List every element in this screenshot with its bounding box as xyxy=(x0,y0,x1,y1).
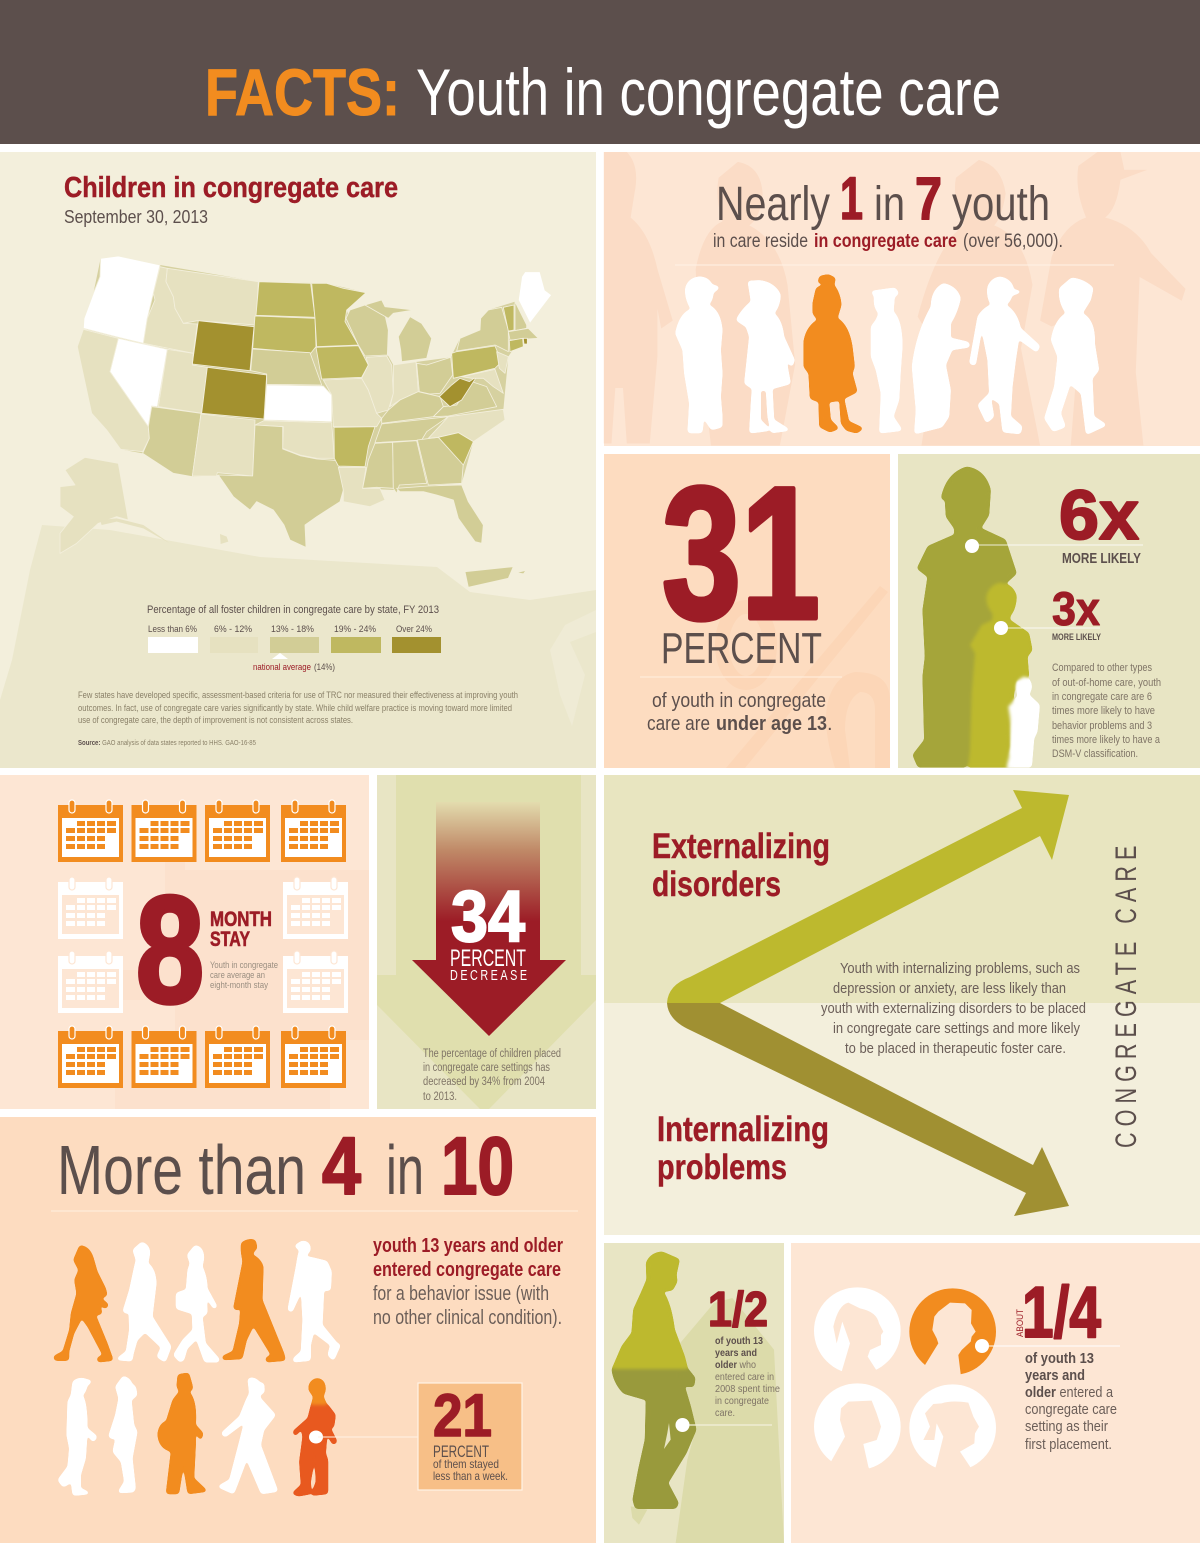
legend: 13% - 18% xyxy=(271,624,314,635)
heading: internalizing: Internalizing xyxy=(657,1110,829,1149)
caption: of youth in congregate xyxy=(652,690,826,712)
heading: externalizing xyxy=(652,827,830,904)
headline: Nearly xyxy=(716,178,830,231)
panel: nearly 1 in 7 xyxy=(604,152,1200,446)
description: depression or anxiety, are less likely than xyxy=(833,980,1066,997)
caption xyxy=(647,690,833,735)
stat: DECREASE xyxy=(450,966,527,983)
description: times more likely to have a xyxy=(1052,734,1161,746)
legend: (14%) xyxy=(314,662,335,672)
headline: 10 xyxy=(441,1121,514,1212)
panel: 8 month stay xyxy=(0,775,369,1109)
stat: 1/2 xyxy=(708,1283,768,1337)
description: in congregate care are 6 xyxy=(1052,691,1152,703)
subheading: in care reside xyxy=(713,231,808,252)
title: Youth in congregate care xyxy=(416,55,1001,129)
description: The percentage of children placed xyxy=(423,1048,561,1060)
stat: 3x: MORE LIKELY xyxy=(1052,632,1102,643)
month stay label: MONTH xyxy=(210,908,272,931)
description: congregate care xyxy=(1025,1401,1117,1418)
description: behavior problems and 3 xyxy=(1052,720,1152,732)
callout: 21 percent: of them stayed xyxy=(433,1457,499,1471)
background child silhouettes xyxy=(604,152,1186,446)
description: decreased by 34% from 2004 xyxy=(423,1076,545,1088)
headline: in xyxy=(386,1131,424,1209)
callout: 21 percent: 21 xyxy=(433,1382,492,1449)
description: in congregate care settings has xyxy=(423,1062,550,1074)
headline xyxy=(716,165,1050,232)
percent label: PERCENT xyxy=(661,624,822,673)
caption xyxy=(210,960,278,990)
stat: 6x: 6x xyxy=(1059,476,1139,554)
watermark building xyxy=(115,845,369,1109)
stat: 34 xyxy=(451,877,525,957)
heading: externalizing: disorders xyxy=(652,865,781,904)
description: first placement. xyxy=(1025,1436,1112,1453)
stat: 1/4 xyxy=(1022,1273,1101,1353)
description: Compared to other types xyxy=(1052,662,1152,674)
caption: care are xyxy=(647,713,710,735)
legend: national average xyxy=(253,662,311,672)
panel: map of children in congregate care xyxy=(0,152,596,768)
title: FACTS: xyxy=(205,55,400,129)
month stay label: STAY xyxy=(210,928,250,951)
panel: 34 percent decrease xyxy=(377,775,596,1109)
panel: one half xyxy=(604,1243,784,1543)
legend: Percentage of all foster children in congregate care by state, FY 2013 xyxy=(147,604,439,616)
legend xyxy=(147,604,441,672)
description: entered congregate care xyxy=(373,1259,561,1281)
map paragraph xyxy=(78,690,518,726)
headline: 1 xyxy=(840,165,863,232)
arrow: internalizing, downward xyxy=(667,1003,1069,1216)
description: to 2013. xyxy=(423,1091,457,1103)
panel: 6x and 3x more likely xyxy=(898,454,1200,768)
arrow: externalizing, upward xyxy=(667,790,1069,1003)
heading: externalizing: Externalizing xyxy=(652,827,830,866)
map paragraph: Few states have developed specific, assessment-based criteria for use of TRC nor measured their effectiveness at improving youth xyxy=(78,690,518,701)
description: times more likely to have xyxy=(1052,705,1155,717)
white calendars xyxy=(58,877,348,1013)
icon: five walking youth, first row xyxy=(54,1240,340,1362)
description: Youth with internalizing problems, such as xyxy=(840,960,1080,977)
map paragraph: outcomes. In fact, use of congregate care varies significantly by state. While child welfare practice is moving toward more limited xyxy=(78,703,512,714)
heading: internalizing xyxy=(657,1110,829,1187)
headline: youth xyxy=(952,178,1050,231)
description: in congregate care settings and more likely xyxy=(833,1020,1080,1037)
legend: 6% - 12% xyxy=(214,624,253,635)
headline: More than xyxy=(57,1131,306,1209)
subheading: (over 56,000). xyxy=(963,231,1063,252)
description xyxy=(821,960,1086,1057)
about label: ABOUT xyxy=(1015,1309,1026,1337)
subheading xyxy=(713,231,1063,252)
callout: 21 percent: less than a week. xyxy=(433,1469,508,1483)
description: setting as their xyxy=(1025,1418,1108,1435)
stat: 3x: 3x xyxy=(1052,582,1100,635)
month stay label xyxy=(210,908,272,951)
description xyxy=(1052,662,1161,760)
stat: PERCENT xyxy=(450,945,526,972)
caption: eight-month stay xyxy=(210,980,268,990)
legend: Less than 6% xyxy=(148,624,197,635)
icon: five walking youth, second row xyxy=(58,1373,337,1496)
choropleth US map xyxy=(60,256,552,587)
panel: more than 4 in 10 xyxy=(0,1117,596,1543)
headline: 7 xyxy=(915,165,942,232)
description: to be placed in therapeutic foster care. xyxy=(845,1040,1066,1057)
subheading: in congregate care xyxy=(814,231,957,252)
orange calendars xyxy=(58,800,346,1088)
caption: care average an xyxy=(210,970,265,980)
title xyxy=(205,55,1001,129)
callout: 21 percent: PERCENT xyxy=(433,1442,489,1461)
heading: internalizing: problems xyxy=(657,1148,787,1187)
date: September 30, 2013 xyxy=(64,207,208,227)
icon: walking youth with bag xyxy=(612,1252,696,1508)
icon: four head silhouettes xyxy=(814,1287,996,1475)
heading: Children in congregate care xyxy=(64,172,398,204)
description: older entered a xyxy=(1025,1384,1114,1401)
description: DSM-V classification. xyxy=(1052,748,1138,760)
description: youth with externalizing disorders to be placed xyxy=(821,1000,1086,1017)
description xyxy=(715,1335,780,1419)
map paragraph: use of congregate care, the depth of improvement is not consistent across states. xyxy=(78,715,353,726)
description xyxy=(423,1048,561,1103)
header banner xyxy=(0,0,1200,144)
background silhouette xyxy=(631,1298,784,1543)
caption: . xyxy=(827,713,833,735)
description: youth 13 years and older xyxy=(373,1235,563,1257)
stat: 6x: MORE LIKELY xyxy=(1062,551,1141,567)
headline xyxy=(57,1121,514,1212)
description: of out-of-home care, youth xyxy=(1052,677,1161,689)
watermark percent sign xyxy=(722,586,890,768)
icon: three child silhouettes xyxy=(913,467,1039,767)
headline: in xyxy=(874,178,905,231)
description: entered care in xyxy=(715,1371,774,1383)
description: of youth 13 xyxy=(1025,1350,1094,1367)
icon: row of seven children, one highlighted xyxy=(676,275,1106,434)
source: Source: GAO analysis of data states reported to HHS. GAO-16-85 xyxy=(78,740,256,747)
description: older who xyxy=(715,1359,756,1371)
description: years and xyxy=(1025,1367,1085,1384)
caption: under age 13 xyxy=(716,713,827,735)
legend: 19% - 24% xyxy=(334,624,376,635)
arrow: downward decrease xyxy=(412,802,566,1036)
description: years and xyxy=(715,1347,757,1359)
description: 2008 spent time xyxy=(715,1383,780,1395)
callout: 21 percent xyxy=(418,1382,522,1490)
description: no other clinical condition). xyxy=(373,1307,562,1329)
panel: externalizing vs internalizing xyxy=(604,775,1200,1235)
big number: 31 xyxy=(662,448,820,658)
big number 8: 8 xyxy=(136,865,204,1035)
description: of youth 13 xyxy=(715,1335,763,1347)
panel: one quarter xyxy=(791,1243,1200,1543)
legend: Over 24% xyxy=(396,624,432,635)
description xyxy=(373,1235,563,1329)
description xyxy=(1025,1350,1117,1453)
description: for a behavior issue (with xyxy=(373,1283,549,1305)
description: in congregate xyxy=(715,1395,769,1407)
headline: 4 xyxy=(322,1121,361,1212)
caption: Youth in congregate xyxy=(210,960,278,970)
description: care. xyxy=(715,1407,735,1419)
panel: 31 percent xyxy=(604,448,890,768)
vertical label: CONGREGATE CARE xyxy=(1108,846,1143,1148)
